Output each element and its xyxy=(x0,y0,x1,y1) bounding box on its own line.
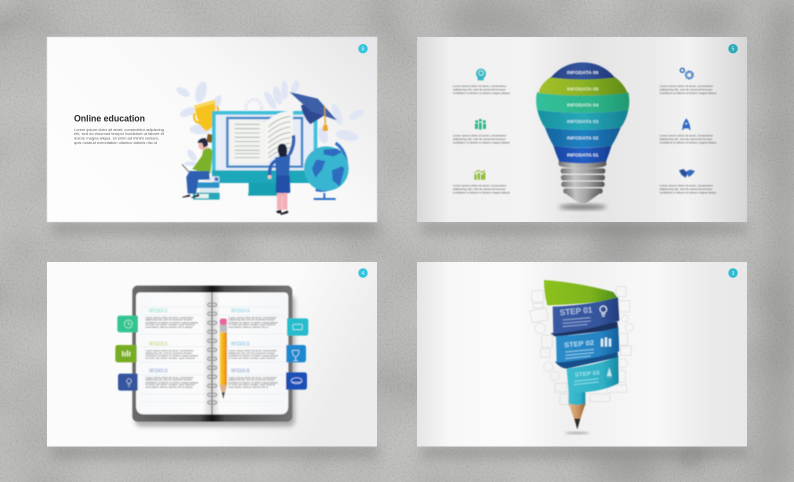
band infodata 01 xyxy=(553,146,612,163)
text block: lorem ipsum: quis nostrud exercitation ullamco laboris nisi ut xyxy=(74,141,158,145)
note 1 xyxy=(145,308,199,329)
icon: rocket xyxy=(682,118,691,130)
text: upper right: Lorem ipsum dolor sit amet, consectetur xyxy=(660,84,713,88)
slide number badge xyxy=(358,268,368,278)
band infodata 05: INFODATA 05 xyxy=(567,86,599,91)
note 2: incididunt ut labore et dolore magna aliqua xyxy=(145,355,199,358)
panel: light bulb infographic slide xyxy=(417,37,747,222)
text: upper left: incididunt ut labore et dolore magna aliqua xyxy=(453,91,510,95)
note 3: incididunt ut labore et dolore magna aliqua xyxy=(145,381,199,384)
note 1: adipiscing elit, sed do eiusmod tempor xyxy=(145,319,192,322)
note 2: Lorem ipsum dolor sit amet, consectetur xyxy=(145,350,194,353)
icon: growth chart xyxy=(474,170,485,180)
text: upper right: incididunt ut labore et dolore magna aliqua xyxy=(660,91,717,95)
pencil xyxy=(220,318,227,399)
text: lower right: Lorem ipsum dolor sit amet, consectetur xyxy=(660,184,713,188)
graduation cap xyxy=(290,92,337,131)
tab: chart xyxy=(115,345,137,362)
note 3: Lorem ipsum dolor sit amet, consectetur xyxy=(145,376,194,379)
note 4: incididunt ut labore et dolore magna aliqua xyxy=(228,321,278,324)
globe xyxy=(304,143,349,199)
note 5: INFODATA 05 xyxy=(231,342,250,348)
note 5: Lorem ipsum dolor sit amet, consectetur xyxy=(228,350,277,353)
note 6: INFODATA 06 xyxy=(231,368,250,374)
note 4: exercitation ullamco laboris nisi ut xyxy=(228,326,269,329)
woman pointing xyxy=(268,135,294,215)
note 5: adipiscing elit, sed do eiusmod tempor xyxy=(228,352,275,355)
text: lower right: adipiscing elit, sed do eiusmod tempor xyxy=(660,187,712,191)
light bulb xyxy=(536,62,629,203)
note 6: Lorem ipsum dolor sit amet, consectetur xyxy=(228,376,277,379)
bulb shadow xyxy=(559,204,607,210)
band infodata 02 xyxy=(545,128,621,148)
notebook shadow xyxy=(135,295,295,427)
note 5: incididunt ut labore et dolore magna aliqua xyxy=(228,355,278,358)
ribbon: step 03: STEP 03 xyxy=(575,371,600,379)
text block: lorem ipsum: Lorem ipsum dolor sit amet, consectetur adipiscing xyxy=(74,128,164,132)
panel: notebook infographic slide xyxy=(47,262,377,446)
note 4: Ut enim ad minim veniam, quis nostrud xyxy=(228,324,276,327)
note 6: Ut enim ad minim veniam, quis nostrud xyxy=(228,384,276,387)
open book xyxy=(230,111,293,164)
note 1: incididunt ut labore et dolore magna aliqua xyxy=(145,321,199,324)
ribbon: step 01: STEP 01 xyxy=(559,304,593,317)
text block: lorem ipsum: dolore magna aliqua. Ut enim ad minim veniam, xyxy=(74,136,159,140)
tab: clock xyxy=(117,316,138,332)
text: upper left: adipiscing elit, sed do eiusmod tempor xyxy=(453,87,506,91)
note 3: INFODATA 03 xyxy=(149,368,168,374)
slide number badge xyxy=(358,44,368,53)
text: upper right: adipiscing elit, sed do eiusmod tempor xyxy=(660,87,712,91)
note 5 xyxy=(228,342,278,360)
text: lower left: incididunt ut labore et dolore magna aliqua xyxy=(453,191,510,195)
note 4: INFODATA 04 xyxy=(231,308,250,314)
panel: pencil steps infographic slide xyxy=(417,262,747,446)
left page xyxy=(136,292,212,414)
trophy xyxy=(194,100,218,143)
note 4 xyxy=(228,308,278,329)
ribbon: step 02: STEP 02 xyxy=(564,340,595,349)
band infodata 02: INFODATA 02 xyxy=(567,135,599,140)
note 1: Lorem ipsum dolor sit amet, consectetur xyxy=(145,316,194,319)
note 2: adipiscing elit, sed do eiusmod tempor xyxy=(145,352,192,355)
ribbon: step 02 xyxy=(551,322,619,363)
text: middle left xyxy=(453,134,510,145)
text: lower left xyxy=(453,184,510,195)
text: lower left: Lorem ipsum dolor sit amet, consectetur xyxy=(453,184,506,188)
icon: handshake xyxy=(679,169,695,178)
gear outline xyxy=(246,100,262,116)
spiral binding xyxy=(208,303,217,404)
band infodata 04: INFODATA 04 xyxy=(567,103,599,108)
decorative leaves xyxy=(175,79,365,166)
books stack xyxy=(193,176,220,200)
note 3: adipiscing elit, sed do eiusmod tempor xyxy=(145,379,192,382)
note 1: Ut enim ad minim veniam, quis nostrud xyxy=(145,324,195,327)
band infodata 04 xyxy=(536,92,629,113)
slide number badge: 5 xyxy=(732,47,735,53)
band infodata 06 xyxy=(551,62,615,79)
text: upper left: Lorem ipsum dolor sit amet, consectetur xyxy=(453,84,506,88)
text: upper right xyxy=(660,84,717,95)
text: middle right: incididunt ut labore et dolore magna aliqua xyxy=(660,141,717,145)
note 6: incididunt ut labore et dolore magna aliqua xyxy=(228,381,278,384)
ruled lines xyxy=(140,307,284,402)
note 6: exercitation ullamco laboris nisi ut xyxy=(228,386,269,389)
note 3: Ut enim ad minim veniam, quis nostrud xyxy=(145,384,195,387)
band infodata 03 xyxy=(537,110,628,130)
note 6: adipiscing elit, sed do eiusmod tempor xyxy=(228,379,275,382)
text: middle left: Lorem ipsum dolor sit amet, consectetur xyxy=(453,134,506,138)
band infodata 03: INFODATA 03 xyxy=(567,119,599,124)
doodle sketches xyxy=(530,287,633,405)
man with laptop xyxy=(182,138,213,198)
text: lower right xyxy=(660,184,717,195)
note 2: INFODATA 02 xyxy=(149,342,168,348)
note 1: exercitation ullamco laboris nisi ut aliquip xyxy=(145,326,193,329)
ribbon: step 01 xyxy=(553,297,619,334)
note 4: Lorem ipsum dolor sit amet, consectetur xyxy=(228,316,277,319)
note 4: adipiscing elit, sed do eiusmod tempor xyxy=(228,319,275,322)
icon: head with gear xyxy=(476,69,486,80)
note 3: exercitation ullamco laboris nisi ut aliquip xyxy=(145,386,193,389)
band infodata 05 xyxy=(538,77,628,96)
tab: cloud xyxy=(286,372,307,390)
tab: trophy xyxy=(286,345,306,362)
text: middle left: adipiscing elit, sed do eiusmod tempor xyxy=(453,137,506,141)
bulb screw base xyxy=(559,161,606,203)
slide number badge xyxy=(728,268,738,278)
tab: bulb xyxy=(118,374,138,391)
note 3 xyxy=(145,368,199,389)
monitor xyxy=(212,111,317,196)
ribbon: green top xyxy=(544,280,619,305)
icon: people group xyxy=(475,119,486,130)
text: middle right: Lorem ipsum dolor sit amet, consectetur xyxy=(660,134,713,138)
text: middle right xyxy=(660,134,717,145)
notebook cover xyxy=(132,286,292,422)
text: lower left: adipiscing elit, sed do eiusmod tempor xyxy=(453,187,506,191)
text: upper left xyxy=(453,84,510,95)
text block: lorem ipsum: elit, sed do eiusmod tempor incididunt ut labore et xyxy=(74,132,165,136)
note 1: INFODATA 01 xyxy=(149,308,168,314)
text: lower right: incididunt ut labore et dolore magna aliqua xyxy=(660,191,717,195)
slide number badge xyxy=(728,44,738,53)
heading: online education: Online education xyxy=(74,113,145,123)
panel: online education slide xyxy=(47,37,377,222)
tab: mail xyxy=(287,318,308,336)
note 6 xyxy=(228,368,278,389)
text block: lorem ipsum xyxy=(74,128,165,145)
right page xyxy=(212,292,288,414)
band infodata 06: INFODATA 06 xyxy=(567,70,599,75)
slide number badge: 3 xyxy=(732,271,735,277)
slide number badge: 4 xyxy=(362,271,365,277)
note 2: Ut enim ad minim veniam, quis nostrud xyxy=(145,357,195,360)
ribbon: step 03 xyxy=(555,350,619,392)
band infodata 01: INFODATA 01 xyxy=(567,152,599,157)
pencil tip xyxy=(565,387,589,434)
icon: gears xyxy=(680,68,693,78)
note 2 xyxy=(145,342,199,360)
note 5: Ut enim ad minim veniam, quis nostrud xyxy=(228,357,276,360)
slide number badge: 6 xyxy=(362,47,365,53)
illustration: online education scene xyxy=(175,79,365,215)
text: middle right: adipiscing elit, sed do eiusmod tempor xyxy=(660,137,712,141)
text: middle left: incididunt ut labore et dolore magna aliqua xyxy=(453,141,510,145)
